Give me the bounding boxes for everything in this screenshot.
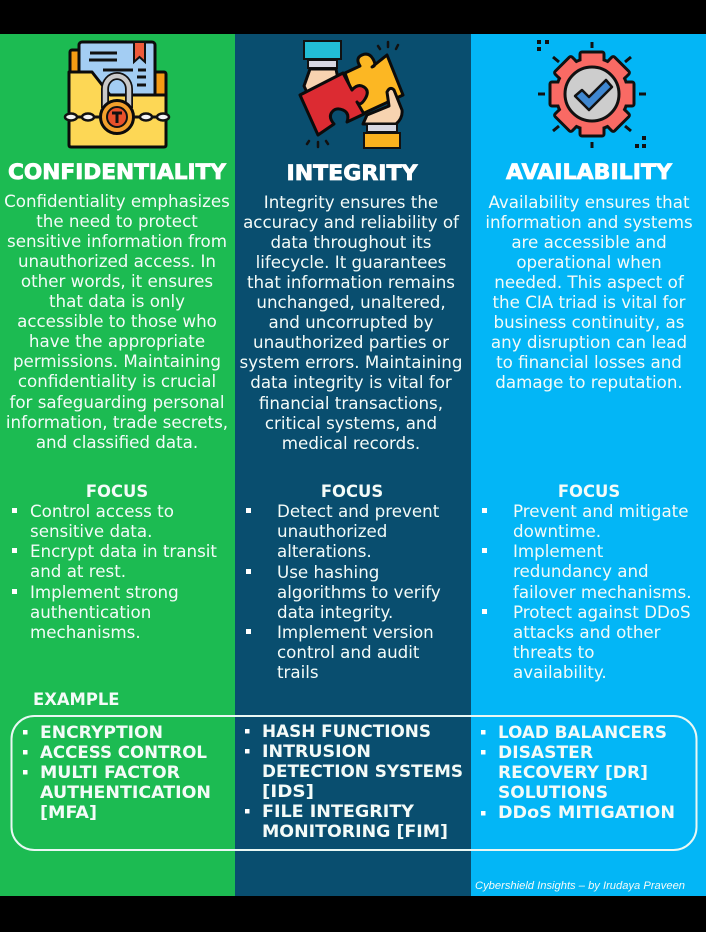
text block: availability description: the CIA triad is vital for: [493, 292, 686, 312]
list: availability examples: DDoS MITIGATION: [498, 803, 675, 823]
heading: integrity: INTEGRITY: [286, 161, 418, 186]
list: integrity focus: [246, 501, 441, 682]
list: integrity examples: FILE INTEGRITY: [262, 802, 415, 822]
list: confidentiality examples: [MFA]: [40, 803, 97, 823]
list: availability focus: attacks and other: [513, 622, 661, 642]
list: availability examples: RECOVERY [DR]: [498, 763, 648, 783]
text block: availability description: [485, 192, 693, 392]
icon: hands joining puzzle pieces: [300, 41, 403, 148]
text block: integrity description: unchanged, unaltered,: [256, 292, 446, 312]
list: availability focus: availability.: [513, 662, 607, 682]
heading: confidentiality: CONFIDENTIALITY: [8, 160, 226, 185]
list: confidentiality focus: Control access to: [30, 501, 174, 521]
list: availability examples: [481, 723, 675, 823]
list: availability focus: Protect against DDoS: [513, 602, 691, 622]
text block: integrity description: financial transactions,: [259, 393, 443, 413]
list: confidentiality focus: sensitive data.: [30, 521, 152, 541]
list: integrity focus: trails: [277, 662, 319, 682]
text block: confidentiality description: for safeguarding personal: [9, 392, 225, 412]
list: confidentiality focus: [12, 501, 217, 642]
text block: confidentiality description: the need to protect: [36, 211, 198, 231]
list: confidentiality examples: ENCRYPTION: [40, 723, 163, 743]
text block: confidentiality description: unauthorized access. In: [18, 251, 216, 271]
list: confidentiality focus: Encrypt data in transit: [30, 541, 217, 561]
text block: confidentiality description: information, trade secrets,: [6, 412, 228, 432]
credit: Cybershield Insights – by Irudaya Praveen: [475, 880, 685, 892]
text block: availability description: any disruption can lead: [491, 332, 687, 352]
list: integrity focus: algorithms to verify: [277, 582, 441, 602]
list: confidentiality focus: and at rest.: [30, 561, 126, 581]
text block: integrity description: system errors. Maintaining: [240, 352, 462, 372]
list: availability examples: SOLUTIONS: [498, 783, 608, 803]
text block: confidentiality description: sensitive information from: [7, 231, 227, 251]
list: integrity focus: alterations.: [277, 541, 372, 561]
text block: availability description: Availability ensures that: [488, 192, 690, 212]
list: availability examples: DISASTER: [498, 743, 593, 763]
text block: integrity description: critical systems, and: [265, 413, 437, 433]
list: confidentiality focus: Implement strong: [30, 582, 179, 602]
list: confidentiality examples: MULTI FACTOR: [40, 763, 180, 783]
list: availability focus: Prevent and mitigate: [513, 501, 688, 521]
text block: integrity description: medical records.: [282, 433, 420, 453]
panel: confidentiality: [0, 34, 235, 896]
list: availability focus: Implement: [513, 541, 604, 561]
panel: availability: [471, 34, 706, 896]
text block: integrity description: that information remains: [247, 272, 455, 292]
list: integrity examples: INTRUSION: [262, 742, 371, 762]
panel: integrity: [235, 34, 471, 896]
list: availability focus: redundancy and: [513, 561, 649, 581]
icon: gear with check mark: [537, 40, 646, 148]
text block: confidentiality description: other words, it ensures: [21, 271, 213, 291]
list: confidentiality examples: [23, 723, 211, 823]
text block: availability description: to financial losses and: [496, 352, 682, 372]
text block: confidentiality description: accessible to those who: [17, 311, 217, 331]
list: confidentiality focus: mechanisms.: [30, 622, 141, 642]
text block: availability description: information and systems: [485, 212, 693, 232]
list: integrity focus: data integrity.: [277, 602, 393, 622]
text block: confidentiality description: have the appropriate: [29, 331, 205, 351]
text block: availability description: operational when: [516, 252, 662, 272]
list: confidentiality examples: AUTHENTICATION: [40, 783, 211, 803]
list: integrity focus: Detect and prevent: [277, 501, 440, 521]
list: integrity focus: unauthorized: [277, 521, 387, 541]
list: availability examples: LOAD BALANCERS: [498, 723, 667, 743]
list: availability focus: threats to: [513, 642, 594, 662]
text block: availability description: needed. This aspect of: [494, 272, 685, 292]
text block: confidentiality description: permissions. Maintaining: [13, 351, 221, 371]
text block: confidentiality description: that data is only: [49, 291, 185, 311]
text block: availability description: damage to reputation.: [495, 372, 683, 392]
text block: confidentiality description: Confidentiality emphasizes: [4, 191, 230, 211]
text block: integrity description: lifecycle. It guarantees: [256, 252, 446, 272]
text block: integrity description: accuracy and reliability of: [243, 212, 460, 232]
text block: integrity description: data integrity is vital for: [250, 372, 452, 392]
text block: confidentiality description: [4, 191, 230, 452]
list: integrity examples: [IDS]: [262, 782, 314, 802]
text block: confidentiality description: and classified data.: [36, 432, 198, 452]
heading: focus: FOCUS: [86, 482, 148, 501]
icon: locked folder: [65, 42, 169, 147]
list: integrity examples: MONITORING [FIM]: [262, 822, 448, 842]
list: integrity examples: HASH FUNCTIONS: [262, 722, 431, 742]
text block: integrity description: and uncorrupted by: [268, 312, 434, 332]
list: confidentiality focus: authentication: [30, 602, 151, 622]
list: integrity examples: [245, 722, 463, 842]
list: confidentiality examples: ACCESS CONTROL: [40, 743, 207, 763]
text block: integrity description: [240, 192, 462, 453]
list: availability focus: [482, 501, 692, 682]
example outline box: [12, 716, 696, 850]
text block: availability description: business continuity, as: [494, 312, 684, 332]
text block: integrity description: unauthorized parties or: [253, 332, 449, 352]
list: integrity focus: control and audit: [277, 642, 420, 662]
heading: example: EXAMPLE: [33, 690, 119, 709]
list: integrity focus: Implement version: [277, 622, 434, 642]
text block: integrity description: Integrity ensures the: [264, 192, 438, 212]
heading: availability: AVAILABILITY: [506, 160, 672, 185]
list: integrity examples: DETECTION SYSTEMS: [262, 762, 463, 782]
list: availability focus: failover mechanisms.: [513, 582, 692, 602]
heading: focus: FOCUS: [321, 482, 383, 501]
list: availability focus: downtime.: [513, 521, 601, 541]
heading: focus: FOCUS: [558, 482, 620, 501]
list: integrity focus: Use hashing: [277, 562, 379, 582]
text block: integrity description: data throughout its: [271, 232, 431, 252]
text block: availability description: are accessible and: [511, 232, 667, 252]
text block: confidentiality description: confidentiality is crucial: [18, 371, 216, 391]
